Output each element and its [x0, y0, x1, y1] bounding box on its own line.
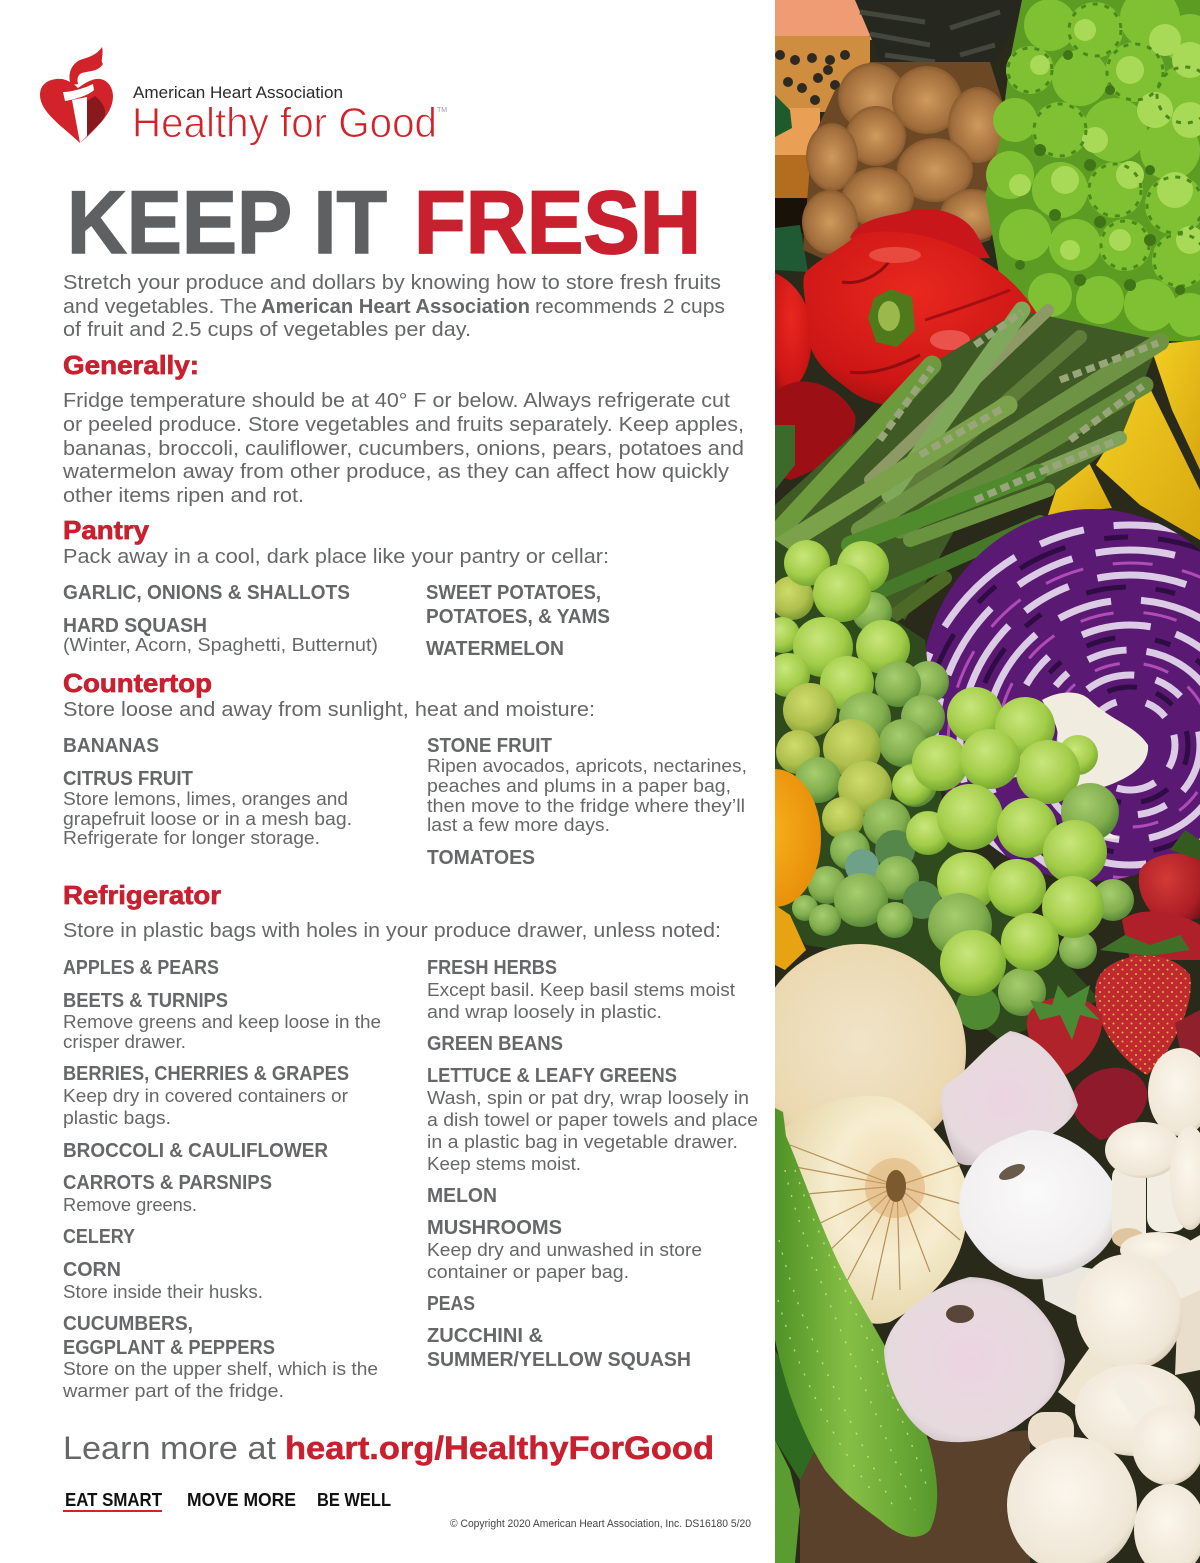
refrigerator left column: BROCCOLI & CAULIFLOWER [63, 1139, 328, 1162]
refrigerator right column: GREEN BEANS [427, 1032, 563, 1055]
intro text: American Heart Association [261, 295, 530, 318]
refrigerator right column: MUSHROOMS [427, 1216, 562, 1239]
intro text: of fruit and 2.5 cups of vegetables per day. [63, 318, 471, 341]
footer tagline: BE WELL [317, 1489, 391, 1510]
paragraph: general storage advice: or peeled produce. Store vegetables and fruits separately. Keep apples, [63, 413, 744, 436]
zucchini [775, 1108, 937, 1537]
yellow squash [1048, 340, 1200, 540]
refrigerator right column: LETTUCE & LEAFY GREENS [427, 1064, 677, 1087]
mushroom stems behind [1028, 1260, 1118, 1450]
pantry right column [426, 581, 610, 660]
heading: Pantry: Pantry [63, 515, 150, 545]
icon: heart and torch [40, 47, 113, 143]
photo: fresh produce [729, 0, 1200, 1563]
countertop left column: CITRUS FRUIT [63, 767, 193, 790]
refrigerator right column: container or paper bag. [427, 1261, 629, 1282]
countertop right column: peaches and plums in a paper bag, [427, 775, 731, 796]
mushrooms [1007, 1048, 1200, 1563]
refrigerator left column: warmer part of the fridge. [62, 1380, 284, 1401]
refrigerator right column [427, 956, 758, 1371]
countertop left column: Store lemons, limes, oranges and [63, 788, 348, 809]
trademark: TM [437, 107, 447, 114]
pantry right column: POTATOES, & YAMS [426, 605, 610, 628]
ground [800, 1430, 1030, 1563]
programme name: Healthy for Good [132, 99, 437, 146]
countertop right column: last a few more days. [427, 814, 610, 835]
pantry intro: Pack away in a cool, dark place like your pantry or cellar: [63, 545, 609, 568]
refrigerator left column: APPLES & PEARS [63, 956, 219, 979]
refrigerator left column: Store on the upper shelf, which is the [63, 1358, 378, 1379]
lettuce [985, 0, 1200, 342]
refrigerator right column: in a plastic bag in vegetable drawer. [427, 1131, 738, 1152]
footer tagline [63, 1489, 391, 1512]
refrigerator left column: Keep dry in covered containers or [63, 1085, 348, 1106]
pantry right column: WATERMELON [426, 637, 564, 660]
refrigerator left column: CELERY [63, 1225, 135, 1248]
refrigerator left column: EGGPLANT & PEPPERS [63, 1336, 275, 1359]
refrigerator right column: Keep stems moist. [427, 1153, 581, 1174]
pineapple [802, 0, 1002, 259]
title [67, 172, 701, 272]
organisation name: American Heart Association [133, 83, 343, 102]
refrigerator left column: Store inside their husks. [63, 1281, 263, 1302]
countertop right column: then move to the fridge where they’ll [427, 795, 745, 816]
refrigerator right column: a dish towel or paper towels and place [427, 1109, 758, 1130]
refrigerator right column: FRESH HERBS [427, 956, 557, 979]
heading: Countertop: Countertop [63, 668, 212, 698]
heading: Refrigerator: Refrigerator [63, 880, 221, 910]
paragraph: general storage advice: watermelon away from other produce, as they can affect how quickly [62, 460, 730, 483]
countertop left column: grapefruit loose or in a mesh bag. [63, 808, 352, 829]
refrigerator left column: CORN [63, 1258, 121, 1281]
intro text: Stretch your produce and dollars by knowing how to store fresh fruits [63, 271, 721, 294]
intro text: recommends 2 cups [535, 295, 725, 318]
paragraph: general storage advice: Fridge temperature should be at 40° F or below. Always refrigerate cut [63, 389, 730, 412]
countertop right column: TOMATOES [427, 846, 535, 869]
call to action: Learn more at [63, 1430, 276, 1466]
refrigerator right column: Keep dry and unwashed in store [427, 1239, 702, 1260]
countertop right column [427, 734, 747, 869]
refrigerator left column: CARROTS & PARSNIPS [63, 1171, 272, 1194]
refrigerator left column: plastic bags. [63, 1107, 171, 1128]
red bell pepper [803, 209, 1048, 406]
title: FRESH [414, 172, 701, 272]
garlic bottom [884, 1277, 1065, 1442]
refrigerator left column: BERRIES, CHERRIES & GRAPES [63, 1062, 349, 1085]
title: KEEP IT [67, 172, 387, 272]
call to action: heart.org/HealthyForGood [285, 1430, 714, 1466]
countertop left column: BANANAS [63, 734, 159, 757]
panel: countertop [63, 668, 747, 869]
refrigerator left column: crisper drawer. [63, 1031, 186, 1052]
refrigerator right column: PEAS [427, 1292, 475, 1315]
intro text [63, 271, 725, 341]
refrigerator right column: ZUCCHINI & [427, 1324, 543, 1347]
pantry left column: HARD SQUASH [63, 614, 207, 637]
call to action [63, 1430, 714, 1466]
pantry right column: SWEET POTATOES, [426, 581, 601, 604]
garlic top [941, 1031, 1078, 1165]
refrigerator right column: Except basil. Keep basil stems moist [427, 979, 735, 1000]
refrigerator right column: and wrap loosely in plastic. [427, 1001, 662, 1022]
photo background [775, 0, 1200, 1563]
footer tagline: MOVE MORE [187, 1489, 296, 1510]
panel: generally [62, 350, 744, 507]
heading: Generally: Generally: [63, 350, 199, 380]
paragraph: general storage advice [62, 389, 744, 507]
intro text: and vegetables. The [63, 295, 257, 318]
garlic centre [959, 1130, 1122, 1279]
papaya [775, 0, 880, 272]
strawberries [1027, 830, 1200, 1140]
asparagus [775, 310, 1160, 620]
refrigerator left column [62, 956, 381, 1401]
paragraph: general storage advice: other items ripen and rot. [63, 484, 304, 507]
refrigerator left column: Remove greens. [63, 1194, 197, 1215]
countertop right column: Ripen avocados, apricots, nectarines, [427, 755, 747, 776]
refrigerator right column: SUMMER/YELLOW SQUASH [427, 1348, 691, 1371]
refrigerator right column: MELON [427, 1184, 497, 1207]
refrigerator left column: CUCUMBERS, [63, 1312, 193, 1335]
refrigerator right column: Wash, spin or pat dry, wrap loosely in [427, 1087, 749, 1108]
red tomatoes and peppers left edge [775, 273, 855, 490]
countertop left column: Refrigerate for longer storage. [63, 827, 320, 848]
countertop intro: Store loose and away from sunlight, heat and moisture: [63, 698, 595, 721]
pantry left column: GARLIC, ONIONS & SHALLOTS [63, 581, 350, 604]
footer tagline: EAT SMART [65, 1489, 163, 1510]
large onion [782, 1096, 968, 1324]
pantry left column: (Winter, Acorn, Spaghetti, Butternut) [63, 634, 378, 655]
top onion [775, 944, 966, 1130]
pantry left column [63, 581, 378, 655]
refrigerator left column: BEETS & TURNIPS [63, 989, 228, 1012]
grapes [764, 540, 1134, 1040]
panel: refrigerator [62, 880, 758, 1401]
refrigerator intro: Store in plastic bags with holes in your produce drawer, unless noted: [63, 919, 721, 942]
panel: pantry [63, 515, 610, 660]
red cabbage [926, 509, 1200, 881]
countertop left column [63, 734, 352, 848]
countertop right column: STONE FRUIT [427, 734, 552, 757]
refrigerator left column: Remove greens and keep loose in the [63, 1011, 381, 1032]
paragraph: general storage advice: bananas, broccoli, cauliflower, cucumbers, onions, pears, potatoes and [63, 437, 744, 460]
logo: American Heart Association Healthy for Good [40, 47, 447, 146]
back zucchini [775, 1350, 815, 1563]
lemon [775, 769, 821, 970]
copyright: © Copyright 2020 American Heart Association, Inc. DS16180 5/20 [450, 1518, 751, 1530]
